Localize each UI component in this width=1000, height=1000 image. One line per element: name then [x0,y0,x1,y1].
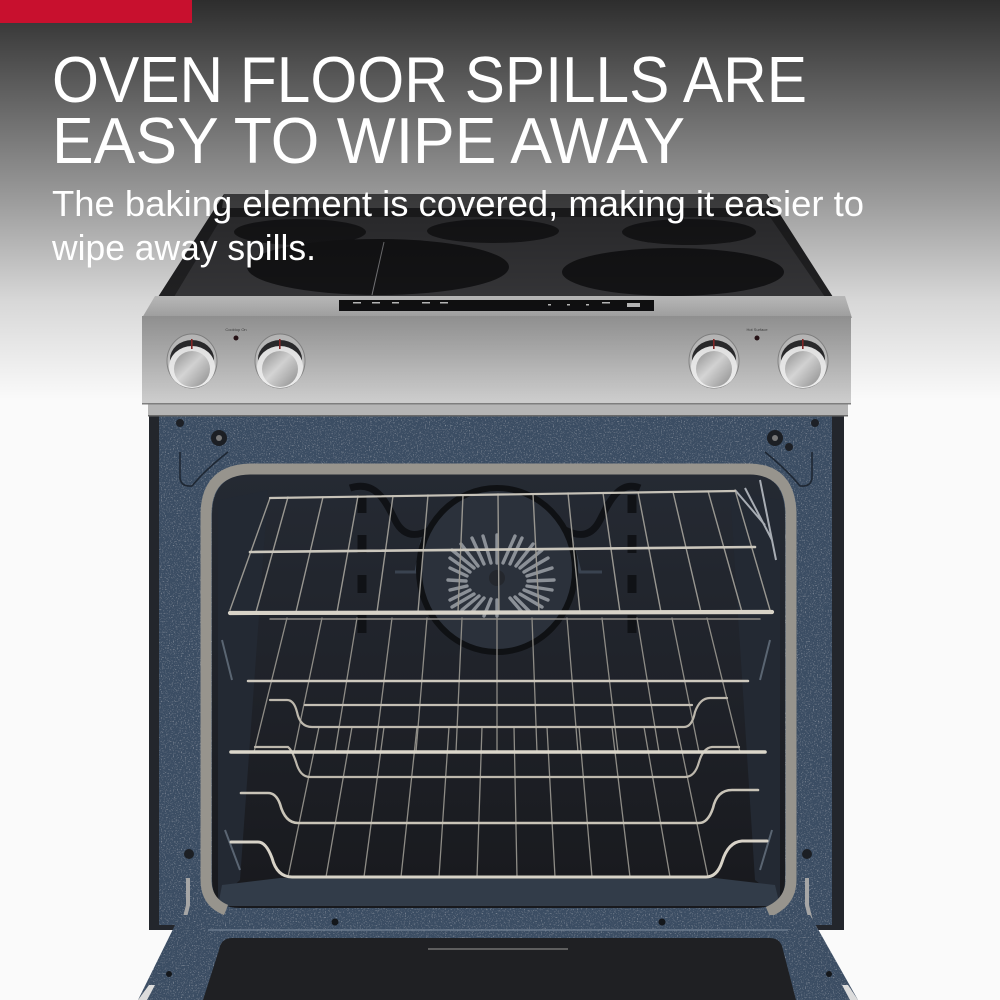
knob 4 [778,334,828,388]
subtitle: wipe away spills. [51,227,316,268]
burner: back right [622,219,756,245]
knob 2 [255,334,305,388]
bottom rack wires [288,727,708,877]
label: hot surface: Hot Surface [746,327,768,332]
panel bottom trim [148,404,848,416]
knob 1 [167,334,217,388]
right wall [730,490,780,900]
left wall [218,490,268,900]
door side trim [138,985,858,1000]
indicator lights [234,336,760,340]
subtitle: The baking element is covered, making it easier to [52,183,864,224]
middle rack wires [254,618,740,752]
knob 3 [689,334,739,388]
oven door gasket [206,469,791,912]
fan cover disc [419,488,575,652]
oven body dark side strips [149,414,844,930]
red accent bar [0,0,192,23]
frame bolts and hinges [176,419,819,925]
burner: front right [562,248,784,296]
oven cavity [212,474,785,908]
title: OVEN FLOOR SPILLS ARE [52,43,807,116]
subtitle [51,183,864,268]
burner: back centre [427,219,559,243]
bottom oven rack [231,727,767,877]
middle oven rack [231,618,765,777]
top rack wires [230,490,770,612]
title [52,43,807,177]
reflective highlights [735,480,776,560]
door screws [332,918,338,926]
door window highlight [428,948,568,950]
control panel [142,296,852,416]
door window [203,938,796,1000]
rear wall shoulders [350,486,640,534]
fan starburst [448,535,554,616]
cooktop [158,194,833,297]
title: EASY TO WIPE AWAY [52,104,685,177]
oven front frame [159,416,832,925]
open oven door [138,915,858,1000]
top oven rack [230,490,772,619]
cavity floor band [218,878,780,906]
label: cooktop on: Cooktop On [225,327,247,332]
dark gradient overlay [0,0,1000,400]
control display [339,300,654,311]
burner: back left [234,219,366,245]
burner: front left [247,239,509,295]
